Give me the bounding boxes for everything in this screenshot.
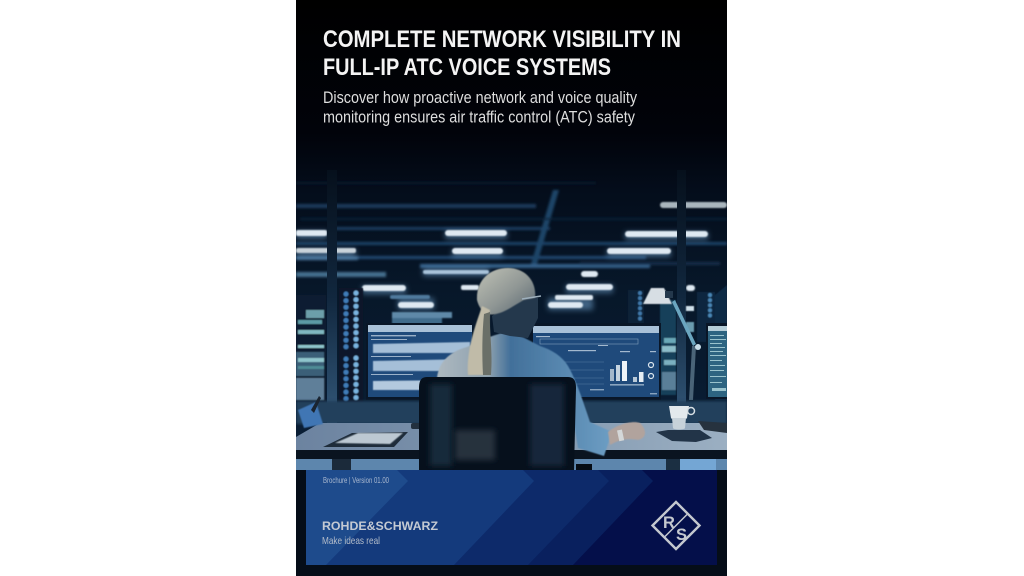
subtitle: monitoring ensures air traffic control (ATC) safety xyxy=(323,108,635,126)
photo: server racks with blue lights xyxy=(296,285,727,412)
ponytail xyxy=(468,306,491,375)
chart: far right monitor xyxy=(706,323,727,399)
photo: desk lamp xyxy=(643,288,701,400)
illustration: woman at desk xyxy=(437,268,645,456)
photo: items on desk xyxy=(298,396,727,447)
version label: Brochure | Version 01.00 xyxy=(323,475,389,485)
footer dark band xyxy=(296,470,727,576)
icon: R&S logo xyxy=(652,502,700,549)
chart: right monitor dashboard xyxy=(530,323,661,400)
photo: ceiling structure xyxy=(296,182,727,277)
panel: brand banner xyxy=(306,470,717,565)
title xyxy=(324,30,680,75)
title: FULL-IP ATC VOICE SYSTEMS xyxy=(323,54,611,81)
brand name: ROHDE&SCHWARZ xyxy=(322,521,438,533)
photo: structural pillars xyxy=(327,170,686,424)
title: COMPLETE NETWORK VISIBILITY IN xyxy=(323,26,681,53)
hand and watch xyxy=(608,422,645,445)
icon: R&S logo: R xyxy=(663,514,675,532)
glasses xyxy=(522,296,541,299)
photo: ceiling lights xyxy=(296,202,727,324)
subtitle: Discover how proactive network and voice quality xyxy=(323,88,637,107)
shirt and arm xyxy=(437,332,612,456)
tagline: Make ideas real xyxy=(322,535,380,547)
banner chevrons xyxy=(306,470,653,565)
hair xyxy=(477,268,535,314)
subtitle xyxy=(323,88,637,126)
photo: ceiling light glow xyxy=(296,231,708,310)
neck and face xyxy=(492,296,538,338)
panel: brochure cover xyxy=(296,0,727,576)
chart: left monitor dashboard xyxy=(366,323,472,400)
photo: wall band behind desk xyxy=(296,401,727,424)
photo: office chair xyxy=(419,377,592,470)
icon: R&S logo: S xyxy=(676,526,687,544)
photo: desk xyxy=(296,423,727,470)
